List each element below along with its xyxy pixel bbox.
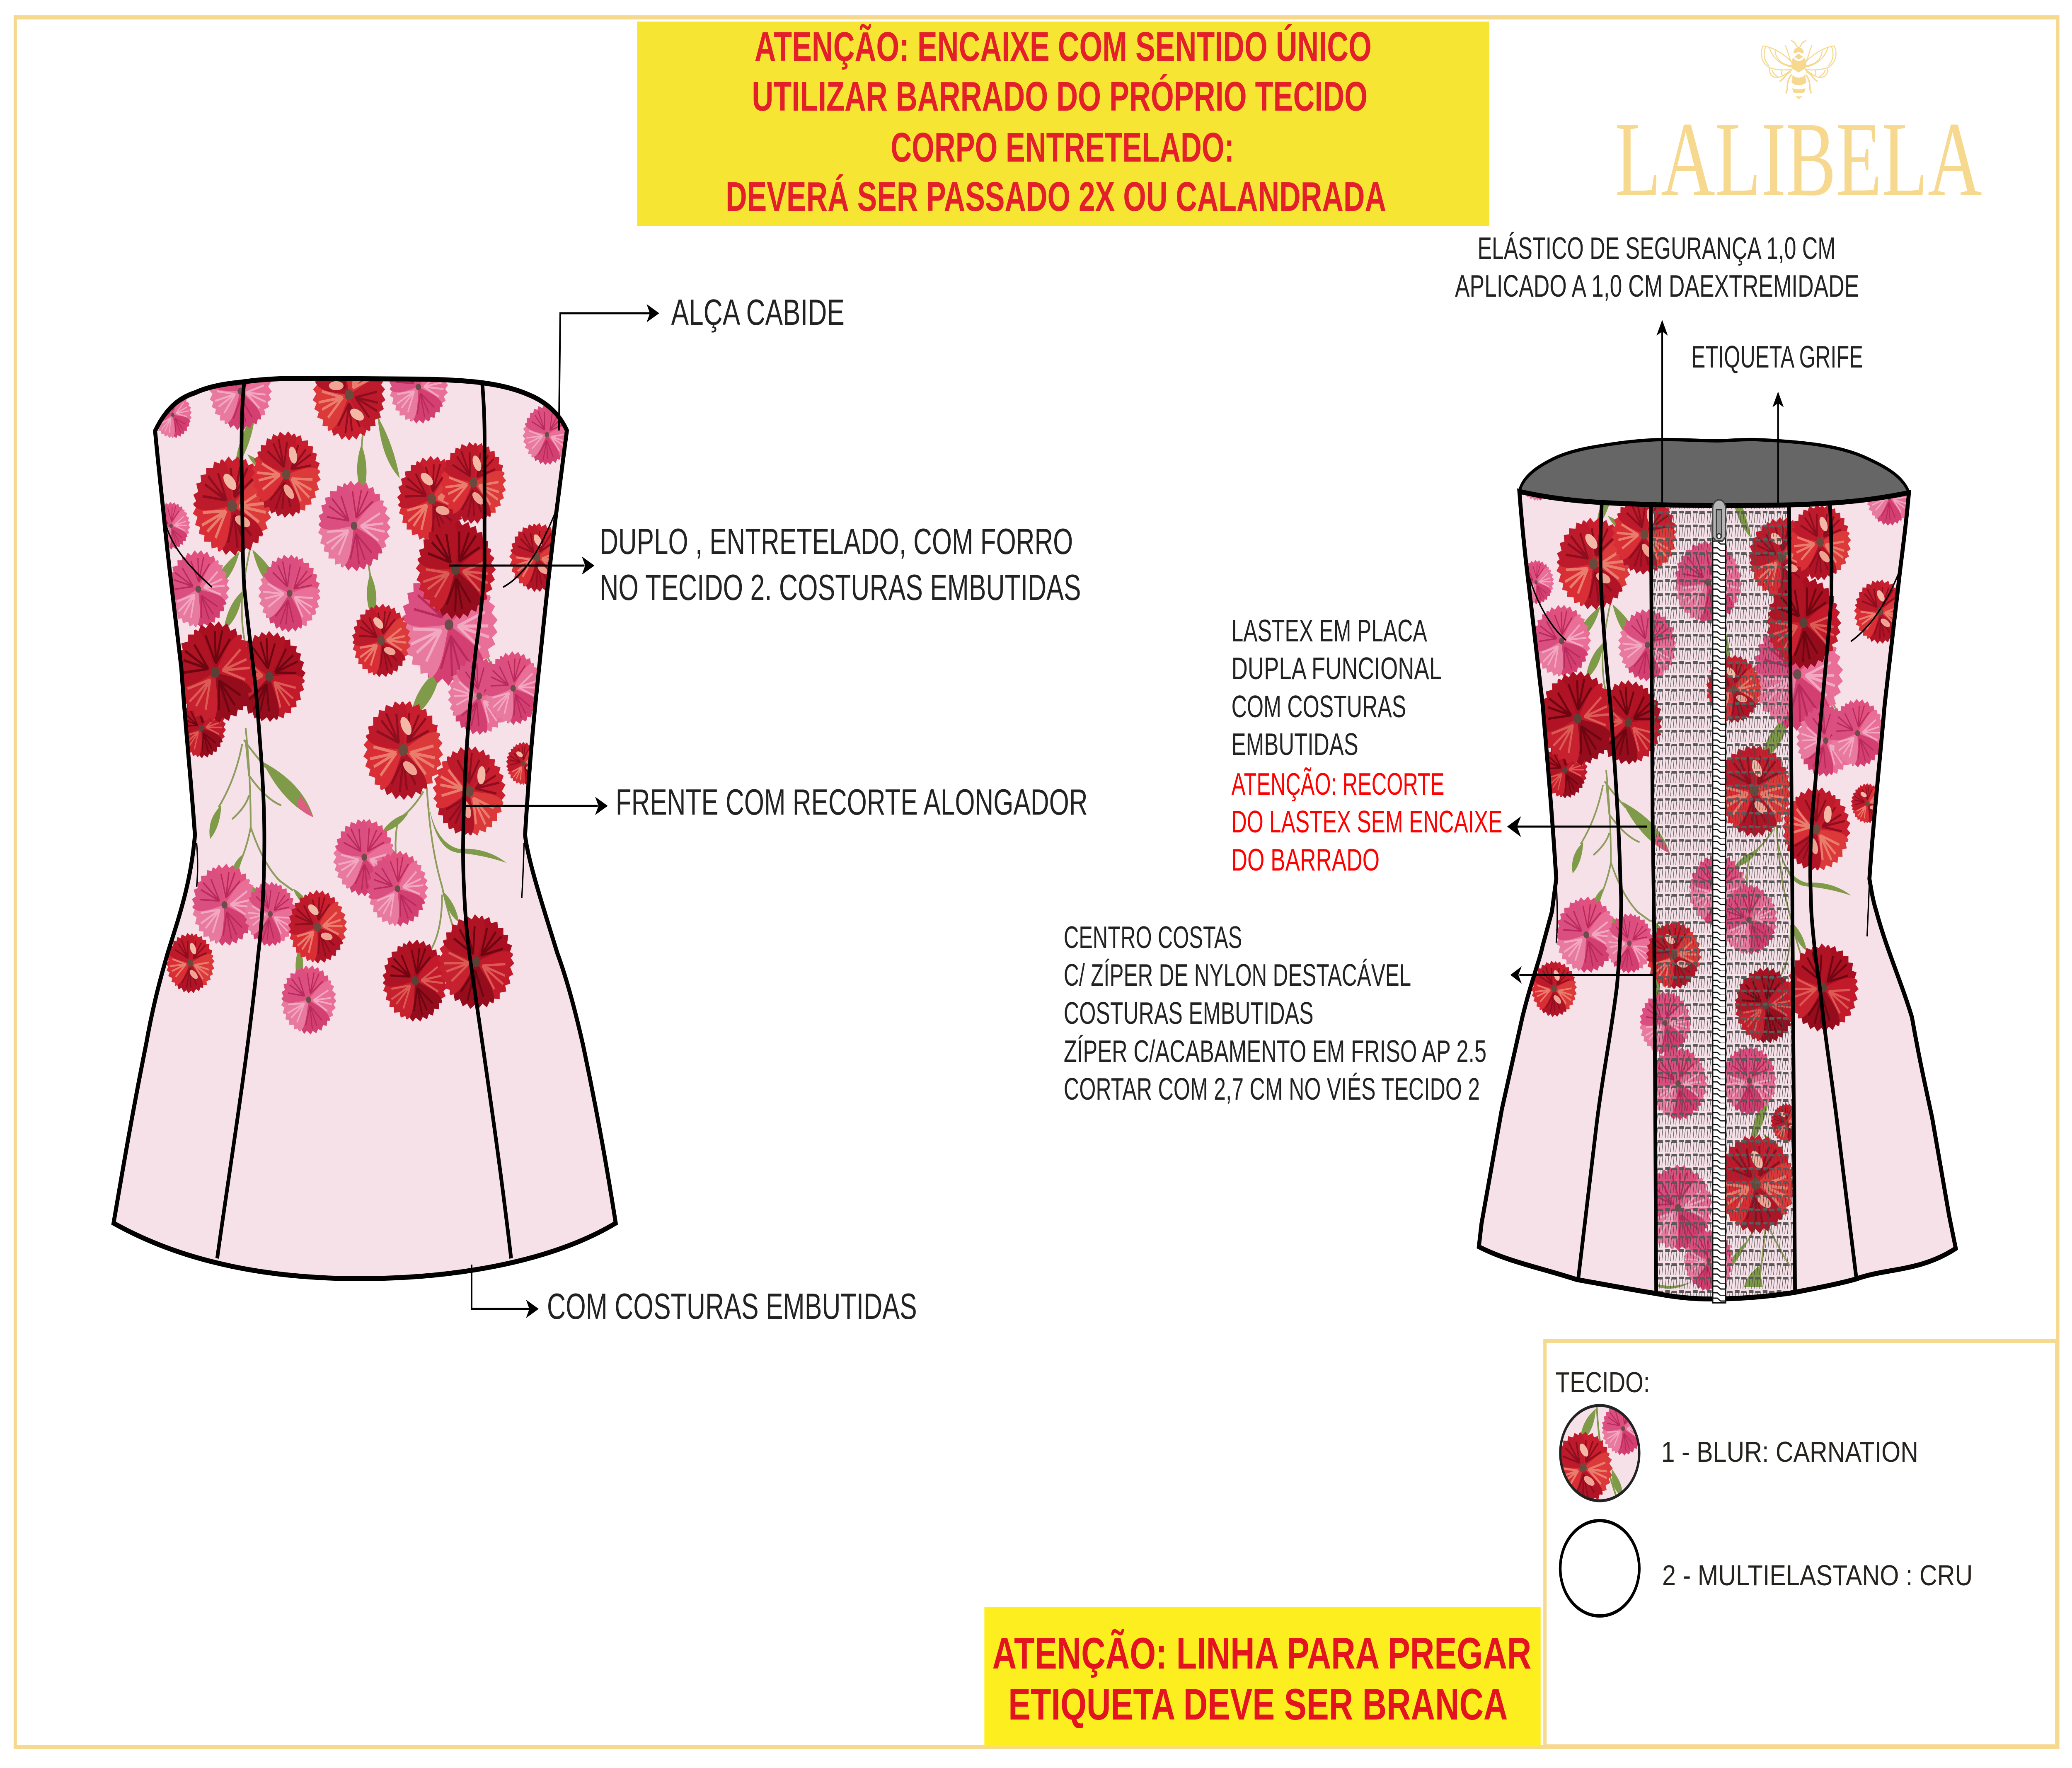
label: elástico de segurança: APLICADO A 1,0 CM DAEXTREMIDADE: [1455, 269, 1859, 304]
panel: tecido legend: [1537, 1341, 2057, 1746]
callout: linha para etiqueta: ETIQUETA DEVE SER BRANCA: [1008, 1679, 1508, 1729]
header warning box: DEVERÁ SER PASSADO 2X OU CALANDRADA: [726, 174, 1386, 220]
zipper: [1713, 500, 1726, 1303]
callout: linha para etiqueta: [984, 1607, 1541, 1746]
header warning box: UTILIZAR BARRADO DO PRÓPRIO TECIDO: [752, 74, 1368, 120]
label: duplo entretelado: [600, 521, 1081, 608]
label: lastex em placa: COM COSTURAS: [1232, 689, 1406, 724]
header warning box: CORPO ENTRETELADO:: [891, 125, 1234, 171]
arrow: duplo entretelado: [449, 556, 595, 575]
legend item 2: 2 - MULTIELASTANO : CRU: [1662, 1560, 1973, 1591]
front darts: [165, 512, 556, 898]
label: elástico de segurança: [1455, 231, 1859, 304]
front seams: [217, 383, 511, 1258]
garment: back bodice: [1479, 405, 1956, 1311]
elastic panel smocking: [1651, 506, 1795, 1299]
garment: front bodice: [114, 335, 616, 1279]
arrow: costuras embutidas: [472, 1265, 539, 1318]
front outline: [114, 378, 616, 1279]
label: alça cabide: ALÇA CABIDE: [671, 292, 845, 333]
label: etiqueta grife: ETIQUETA GRIFE: [1692, 340, 1863, 375]
label: lastex em placa: LASTEX EM PLACA: [1232, 614, 1427, 648]
header warning box: ATENÇÃO: ENCAIXE COM SENTIDO ÚNICO: [755, 24, 1372, 70]
label: centro costas: C/ ZÍPER DE NYLON DESTACÁVEL: [1064, 958, 1411, 993]
label: duplo entretelado: DUPLO , ENTRETELADO, COM FORRO: [600, 521, 1073, 562]
back seams: [1578, 503, 1857, 1294]
logo wordmark: LALIBELA: [1615, 100, 1982, 218]
label: centro costas: CENTRO COSTAS: [1064, 920, 1242, 955]
floral print: front: [146, 335, 584, 1051]
arrow: centro costas: [1510, 966, 1654, 984]
inner waistband: [1519, 440, 1909, 505]
arrow: elástico de segurança: [1656, 320, 1668, 503]
callout: linha para etiqueta: ATENÇÃO: LINHA PARA PREGAR: [992, 1628, 1531, 1678]
floral print: back: [1512, 405, 1924, 1071]
arrow: frente com recorte: [464, 797, 608, 815]
label: lastex em placa: DUPLA FUNCIONAL: [1232, 651, 1442, 686]
label: centro costas: ZÍPER C/ACABAMENTO EM FRISO AP 2.5: [1064, 1034, 1486, 1069]
label: costuras embutidas: COM COSTURAS EMBUTIDAS: [547, 1286, 917, 1327]
label: lastex em placa: EMBUTIDAS: [1232, 727, 1358, 762]
extra flowers on elastic panel: [1657, 1047, 1793, 1291]
logo: Lalibela: [1615, 40, 1982, 218]
label: lastex em placa: [1232, 614, 1503, 878]
label: frente com recorte: FRENTE COM RECORTE ALONGADOR: [616, 782, 1088, 822]
back darts: [1528, 570, 1900, 943]
back outline: [1479, 491, 1956, 1299]
arrow: alça cabide: [559, 304, 659, 431]
label: centro costas: COSTURAS EMBUTIDAS: [1064, 996, 1314, 1031]
arrow: etiqueta grife: [1772, 392, 1784, 506]
label: lastex em placa: DO BARRADO: [1232, 843, 1380, 878]
icon: bee: [1761, 40, 1836, 99]
arrow: lastex: [1507, 816, 1647, 837]
label: centro costas: CORTAR COM 2,7 CM NO VIÉS TECIDO 2: [1064, 1072, 1480, 1107]
label: lastex em placa: ATENÇÃO: RECORTE: [1232, 767, 1444, 802]
swatch: carnation fabric: [1559, 1404, 1641, 1502]
label: elástico de segurança: ELÁSTICO DE SEGURANÇA 1,0 CM: [1477, 231, 1835, 266]
legend title: TECIDO:: [1556, 1367, 1650, 1398]
back fabric: [1479, 491, 1956, 1299]
label: duplo entretelado: NO TECIDO 2. COSTURAS EMBUTIDAS: [600, 567, 1081, 608]
legend item 1: 1 - BLUR: CARNATION: [1661, 1436, 1918, 1468]
label: lastex em placa: DO LASTEX SEM ENCAIXE: [1232, 805, 1503, 839]
swatch: cru fabric: [1560, 1521, 1639, 1616]
header warning box: [637, 22, 1489, 226]
label: centro costas: [1064, 920, 1486, 1107]
